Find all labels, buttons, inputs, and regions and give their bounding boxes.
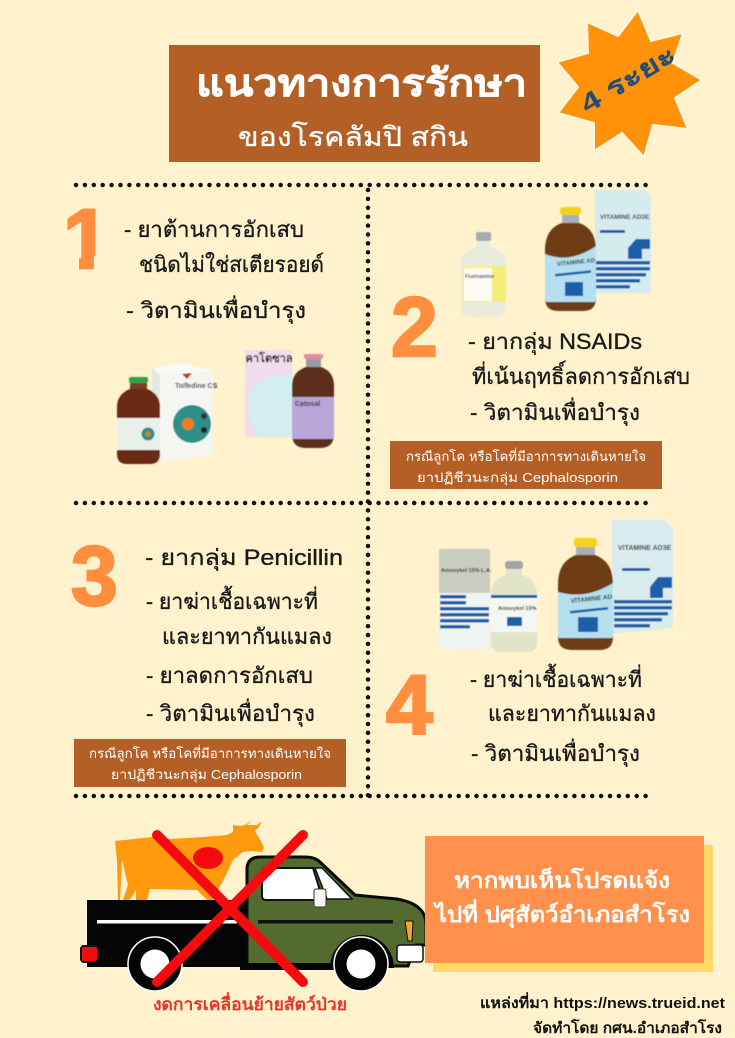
trims: [97, 920, 237, 924]
product: vitamine bottle and box: [545, 190, 651, 311]
title banner: ของโรคลัมปิ สกิน: [238, 122, 468, 152]
callout: cephalosporin note: ยาปฏิชีวนะกลุ่ม Cephalosporin: [111, 767, 302, 783]
stage 2 text: [468, 329, 690, 426]
product: vitamine bottle and box: VITAMINE AD: [570, 594, 613, 605]
product: Catosal box and bottle: Catosal: [295, 401, 320, 408]
stage 2 text: ที่เน้นฤทธิ์ลดการอักเสบ: [472, 361, 690, 389]
callout: cephalosporin note: [74, 739, 346, 787]
stage 2 text: - วิตามินเพื่อบำรุง: [470, 397, 640, 426]
number 4: 4: [386, 658, 433, 752]
callout: report to livestock office: ไปที่ ปศุสัตว์อำเภอสำโรง: [433, 898, 690, 929]
product: vitamine bottle and box: VITAMINE AD: [557, 258, 596, 268]
caption: no moving sick animals: งดการเคลื่อนย้ายสัตว์ป่วย: [153, 992, 347, 1014]
mirror: [314, 889, 326, 907]
product: vitamine bottle and box: [558, 520, 673, 650]
stage 1 text: - วิตามินเพื่อบำรุง: [126, 295, 306, 324]
red lesion: [193, 847, 223, 869]
product: Tolfedine bottle and box: [117, 363, 218, 464]
stage 4 text: [470, 664, 656, 767]
product: clear bottle: Flunixamine: [465, 274, 494, 280]
product: vitamine bottle and box: VITAMINE AD3E: [618, 545, 672, 552]
stage 4 text: และยาทากันแมลง: [488, 701, 656, 726]
stage 4 text: - วิตามินเพื่อบำรุง: [471, 738, 640, 767]
product: Amoxykel box and bottle: [439, 549, 537, 652]
stage 2 text: - ยากลุ่ม NSAIDs: [468, 329, 642, 355]
red cross: [157, 835, 303, 982]
cow silhouette: [115, 820, 264, 900]
callout: cephalosporin note: [390, 441, 662, 489]
stage 3 text: [145, 545, 343, 727]
illustration: no moving sick cattle truck: [81, 820, 426, 991]
stage 1 text: [124, 217, 324, 324]
callout: cephalosporin note: กรณีลูกโค หรือโคที่มีอาการทางเดินหายใจ: [89, 745, 331, 762]
stage 4 text: - ยาฆ่าเชื้อเฉพาะที่: [470, 664, 642, 692]
product: Amoxykel box and bottle: Amoxykel 15%: [498, 606, 537, 612]
product: Catosal box and bottle: คาโตซาล: [246, 351, 293, 365]
badge: 4 stages star: [557, 10, 702, 157]
dotted grid dividers: [76, 185, 654, 796]
bumper and tail light: [397, 945, 423, 962]
title banner: [169, 45, 540, 162]
panel: stage 3: [71, 529, 346, 787]
product: Catosal box and bottle: [245, 350, 334, 448]
number 2: 2: [391, 280, 438, 374]
stage 3 text: - ยาลดการอักเสบ: [146, 663, 313, 688]
stage 1 text: - ยาต้านการอักเสบ: [124, 217, 304, 242]
badge: 4 stages star: 4 ระยะ: [575, 39, 681, 119]
number 3: 3: [71, 529, 118, 623]
callout: cephalosporin note: กรณีลูกโค หรือโคที่มีอาการทางเดินหายใจ: [406, 448, 646, 465]
product: clear bottle: [461, 232, 506, 317]
wheel arch: [330, 935, 394, 968]
source credit: จัดทำโดย กศน.อำเภอสำโรง: [533, 1018, 722, 1037]
cab windows: [262, 868, 323, 900]
source credit: [480, 992, 725, 1037]
callout: report to livestock office: [425, 836, 713, 972]
stage 3 text: - ยากลุ่ม Penicillin: [145, 545, 343, 571]
product: Amoxykel box and bottle: Amoxykel 15% L.A.: [441, 568, 492, 574]
callout: report to livestock office: หากพบเห็นโปรดแจ้ง: [454, 866, 670, 893]
stage 3 text: - วิตามินเพื่อบำรุง: [146, 698, 315, 727]
callout: cephalosporin note: ยาปฏิชีวนะกลุ่ม Cephalosporin: [417, 470, 618, 486]
truck bed: [87, 900, 247, 967]
product: vitamine bottle and box: VITAMINE AD3E: [600, 214, 650, 221]
product: Tolfedine bottle and box: Tolfedine CS: [175, 383, 218, 390]
truck lower chassis: [240, 963, 340, 970]
title banner: แนวทางการรักษา: [196, 63, 527, 105]
panel: stage 2: [390, 190, 690, 489]
number 1: 1: [63, 192, 110, 286]
stage 1 text: ชนิดไม่ใช่สเตียรอยด์: [139, 252, 324, 277]
source credit: แหล่งที่มา https://news.trueid.net: [480, 992, 725, 1012]
panel: stage 1: [63, 192, 334, 464]
truck cab: [247, 857, 426, 966]
panel: stage 4: [386, 520, 673, 767]
stage 3 text: - ยาฆ่าเชื้อเฉพาะที่: [146, 586, 318, 614]
wheels: [128, 937, 182, 991]
stage 3 text: และยาทากันแมลง: [162, 624, 332, 649]
